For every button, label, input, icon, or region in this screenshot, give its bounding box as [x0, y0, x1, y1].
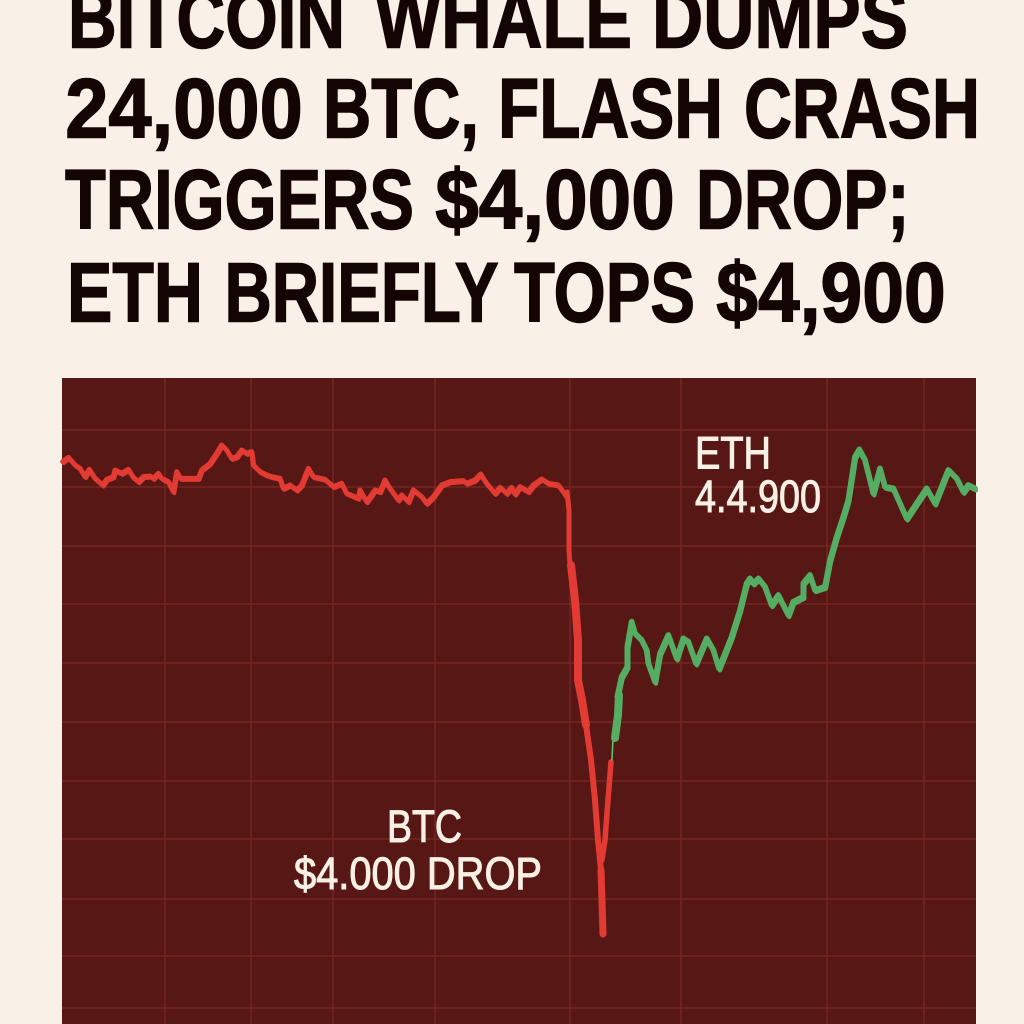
label: ETH: ETH [695, 428, 771, 478]
label: ETH [695, 428, 821, 522]
label: BTC [294, 801, 542, 899]
ETH price line [612, 449, 976, 760]
BTC price line [63, 445, 611, 934]
title: BRIEFLY [224, 245, 498, 339]
title: $4,900 [716, 245, 946, 339]
chart panel [62, 378, 976, 1024]
title: BTC, [323, 61, 479, 155]
title: TOPS [514, 245, 695, 339]
title: 24,000 [65, 61, 303, 155]
label: ETH: 4.4.900 [695, 471, 821, 522]
title [65, 0, 980, 339]
title: FLASH [498, 61, 723, 155]
label: BTC: BTC [387, 801, 462, 852]
title: DROP; [696, 152, 910, 246]
title: $4,000 [435, 152, 675, 246]
label: BTC: $4.000 DROP [294, 848, 542, 899]
title: TRIGGERS [65, 152, 414, 246]
title: ETH [67, 245, 203, 339]
